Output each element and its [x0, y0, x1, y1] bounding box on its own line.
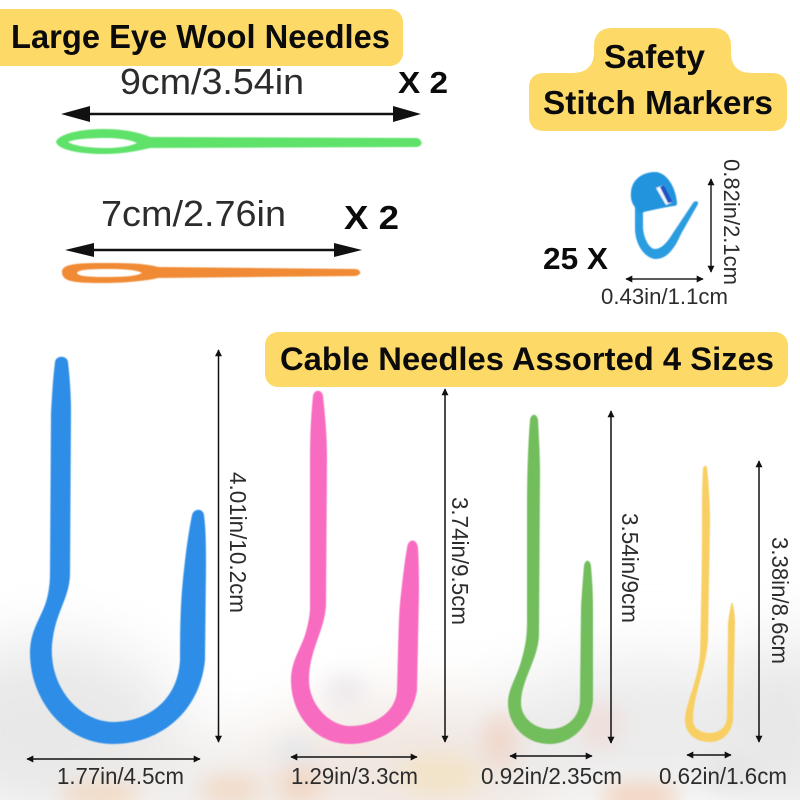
height label: 3.74in/9.5cm [447, 497, 473, 625]
heading: Safety Stitch Markers [529, 28, 787, 131]
height label: 4.01in/10.2cm [225, 472, 251, 613]
heading: Safety Stitch Markers: Safety [604, 38, 706, 75]
quantity: X 2 green: X 2 [398, 65, 448, 100]
heading: Cable Needles Assorted 4 Sizes: Cable Needles Assorted 4 Sizes [280, 341, 774, 377]
icon: orange needle [62, 263, 360, 283]
width label: 0.62in/1.6cm [659, 763, 787, 789]
arrow: 9cm [61, 106, 421, 122]
quantity: X 2 orange: X 2 [344, 199, 399, 236]
label: 7cm length: 7cm/2.76in [101, 193, 286, 234]
height label: 3.38in/8.6cm [767, 537, 793, 664]
marker height arrow [710, 179, 712, 272]
height arrow [758, 461, 760, 742]
icon: green needle [56, 129, 422, 154]
height arrow [218, 350, 220, 742]
marker height label: 0.82in/2.1cm [719, 159, 744, 285]
marker width label: 0.43in/1.1cm [601, 284, 728, 309]
blue cable needle [27, 350, 251, 789]
green cable needle [481, 411, 643, 789]
width label: 1.77in/4.5cm [57, 763, 184, 789]
heading: Large Eye Wool Needles [0, 9, 403, 66]
icon: yellow hook [685, 466, 735, 742]
heading: Cable Needles Assorted 4 Sizes [265, 332, 788, 387]
icon: blue stitch marker [631, 172, 698, 259]
icon: green hook [508, 415, 593, 744]
arrow: 7cm [65, 243, 362, 257]
large green wool needle with dimension [56, 61, 422, 154]
width label: 0.92in/2.35cm [481, 763, 622, 789]
width label: 1.29in/3.3cm [291, 763, 418, 789]
marker width arrow [626, 278, 703, 280]
icon: pink hook [291, 391, 419, 744]
yellow cable needle [659, 461, 793, 789]
height arrow [610, 411, 612, 743]
heading: Safety Stitch Markers: Stitch Markers [543, 84, 773, 121]
width arrow [27, 758, 200, 760]
quantity: 25 X: 25 X [543, 241, 608, 276]
icon: blue hook [30, 357, 206, 744]
small orange wool needle with dimension [62, 193, 362, 283]
pink cable needle [291, 389, 473, 789]
label: 9cm length: 9cm/3.54in [120, 61, 304, 102]
heading: Large Eye Wool Needles: Large Eye Wool Needles [11, 18, 390, 55]
height label: 3.54in/9cm [617, 513, 643, 623]
width arrow [291, 756, 417, 758]
width arrow [510, 755, 592, 757]
width arrow [687, 754, 731, 756]
height arrow [444, 389, 446, 742]
